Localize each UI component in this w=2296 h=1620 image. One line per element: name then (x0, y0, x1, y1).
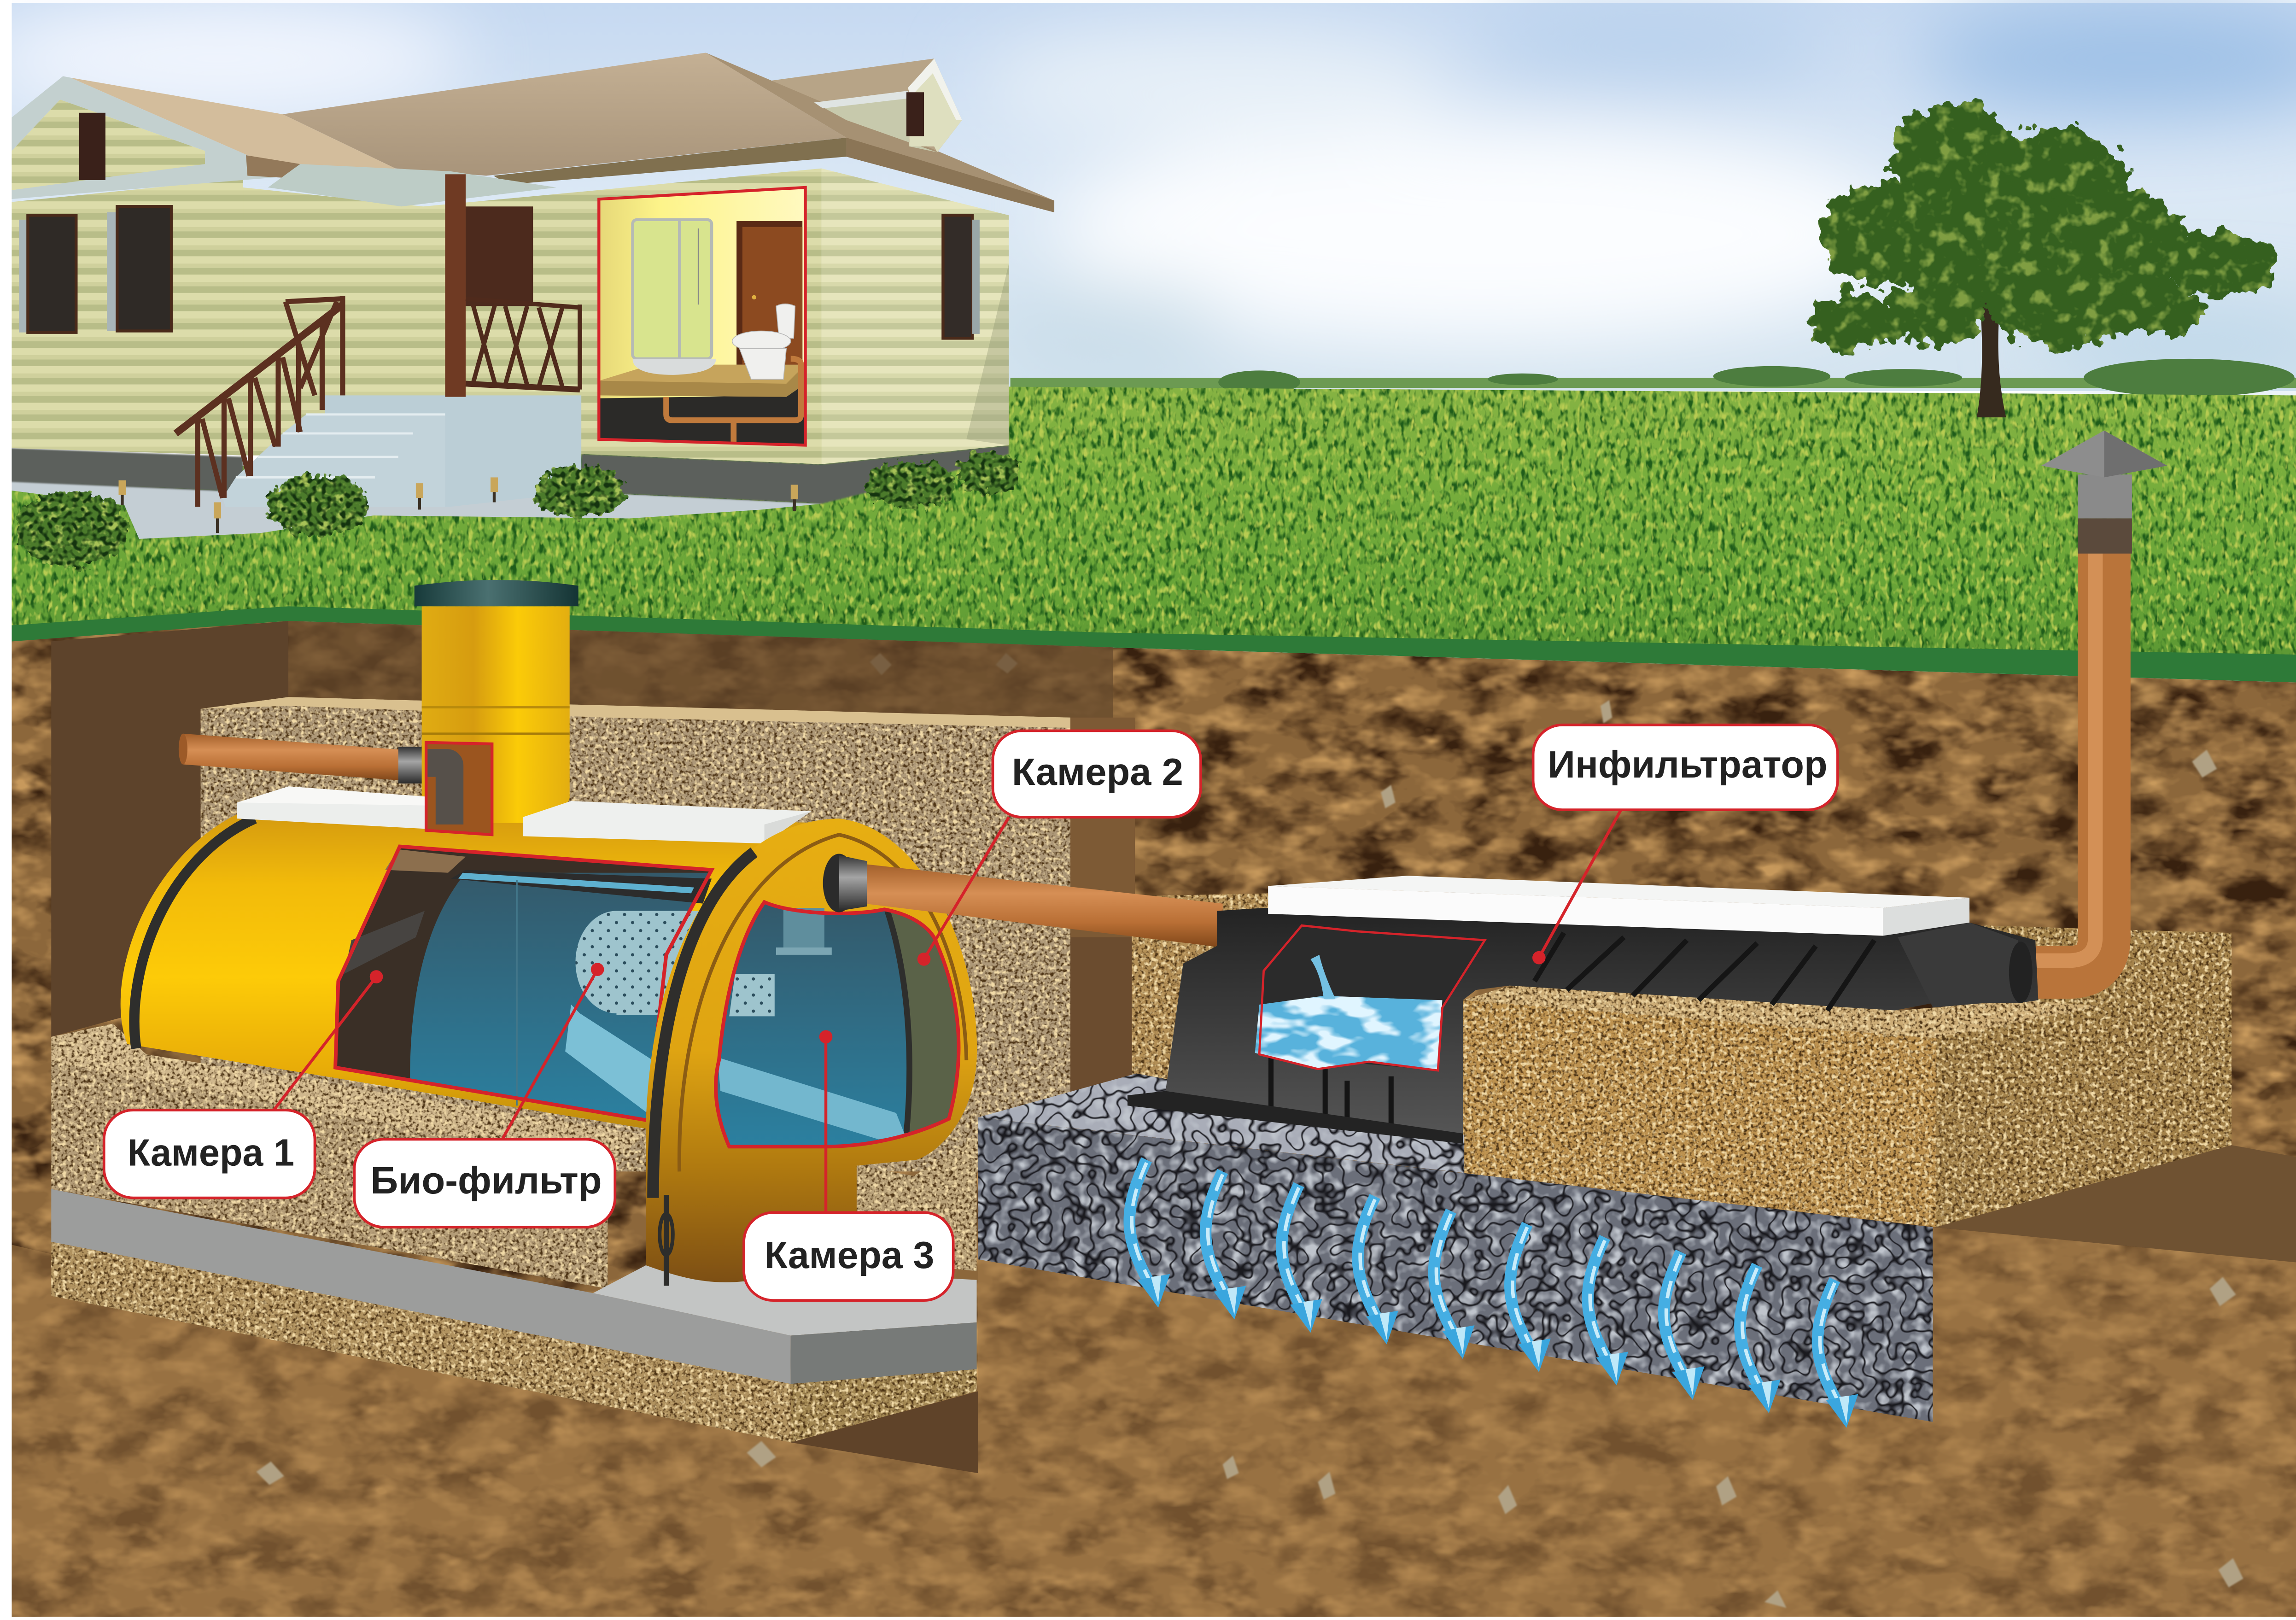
bathroom frame (599, 187, 806, 445)
sand block behind infiltrator (1132, 893, 1268, 1091)
inlet pipe (179, 734, 427, 784)
slab on top (1268, 876, 1969, 936)
manhole lid (415, 580, 578, 606)
distant tree line (1011, 359, 2296, 397)
sand bed under tank (51, 1023, 977, 1289)
sky (0, 0, 2296, 391)
label: Био-фильтр (354, 1139, 615, 1227)
end flange (646, 819, 977, 1286)
tank body (121, 813, 832, 1142)
dormer (814, 58, 962, 152)
porch column (445, 174, 466, 397)
soil lower section, lighter (12, 1227, 2296, 1617)
concrete slab (51, 1189, 977, 1384)
white slab left (237, 786, 426, 829)
door (466, 206, 533, 306)
porch roof (268, 164, 556, 206)
bathroom cutaway (599, 187, 806, 445)
grass field (12, 386, 2296, 677)
infiltrator (1128, 876, 2038, 1144)
bushes (16, 452, 1021, 567)
soil background (12, 621, 2296, 1617)
porch railing (466, 299, 580, 390)
chamber cutaway (335, 847, 776, 1120)
label: Камера 2: Камера 2 (1012, 750, 1183, 793)
white slab right (523, 801, 811, 843)
bio-filter cylinder (575, 911, 776, 1015)
water seepage arrows (1129, 1160, 1858, 1428)
end cone (1898, 923, 2018, 1007)
label: Камера 1 (104, 1110, 315, 1198)
toilet (732, 304, 795, 379)
label: Био-фильтр: Био-фильтр (370, 1159, 602, 1202)
riser neck (422, 606, 570, 823)
ribs (1271, 933, 1874, 1128)
leader lines (274, 810, 1621, 1212)
stair railing (176, 296, 343, 507)
oak tree (1808, 103, 2277, 417)
walls (10, 169, 1009, 464)
soil stones (256, 653, 2243, 1608)
label: Инфильтратор (1533, 725, 1838, 810)
label: Камера 2 (993, 731, 1201, 817)
right chamber cutaway (716, 902, 958, 1146)
house walkway (12, 480, 822, 539)
label: Инфильтратор: Инфильтратор (1548, 743, 1828, 786)
label: Камера 3: Камера 3 (765, 1234, 934, 1276)
lower sand layer (51, 1242, 977, 1443)
sewer pipes (666, 359, 801, 444)
submerged pipe (565, 1005, 662, 1113)
house (10, 53, 1054, 567)
infiltrator cutaway (1255, 925, 1485, 1070)
roof (283, 53, 1054, 212)
body (1166, 908, 2038, 1135)
turf edge strip (12, 606, 2296, 683)
gravel bed (978, 1073, 1933, 1422)
pit walls (51, 621, 2296, 1473)
bathroom door (736, 221, 802, 365)
label: Камера 1: Камера 1 (128, 1131, 294, 1174)
porch base and steps (222, 395, 581, 507)
septic tank (121, 580, 977, 1286)
base plate (1128, 1091, 1463, 1144)
sand block behind tank (201, 697, 1070, 1171)
left gable (10, 76, 395, 199)
garden lamps (119, 477, 798, 533)
left white margin (0, 0, 12, 1620)
stone foundation (10, 445, 1009, 504)
label: Камера 3 (744, 1212, 953, 1300)
windows (19, 206, 980, 338)
shower cabin (632, 220, 716, 375)
riser cutaway with elbow (426, 743, 492, 835)
vent pipe with cap (2018, 431, 2167, 972)
outlet pipe (823, 854, 1223, 947)
tank rim band (134, 819, 255, 1048)
right sand block (1463, 925, 2232, 1227)
